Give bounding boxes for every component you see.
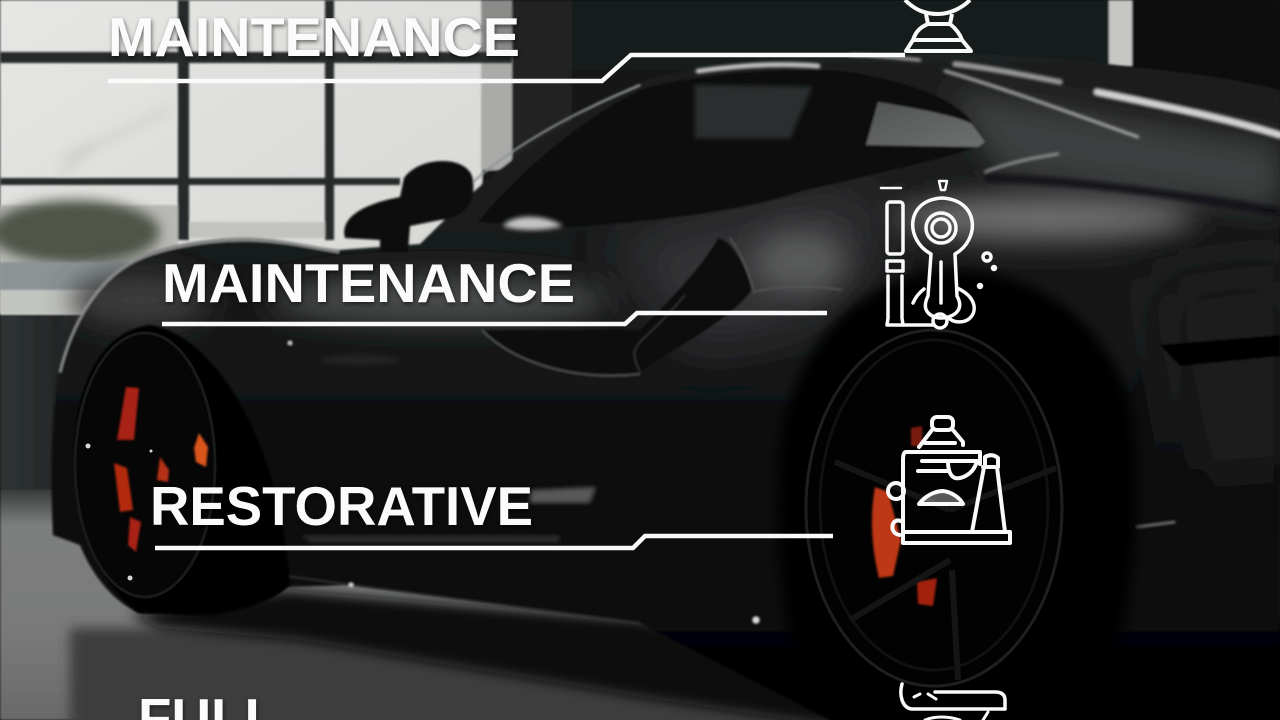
callout line 3 [155, 536, 833, 548]
window frame and view [0, 0, 512, 314]
windshield pillar highlight [473, 85, 640, 182]
rear quarter glass [866, 102, 985, 147]
icon: bottom item [901, 684, 1005, 720]
rear flank [1150, 260, 1280, 490]
mirror [344, 161, 473, 252]
callout line 1 [108, 55, 905, 81]
heading: Restorative: RESTORATIVE [150, 475, 533, 537]
icon: bottle and cone [888, 417, 1010, 543]
windshield glint [503, 217, 563, 230]
door highlight [755, 232, 845, 292]
rear deck [950, 90, 1280, 210]
glass reflection [695, 85, 812, 138]
rear arch and tire [778, 270, 1136, 720]
vent [482, 238, 752, 374]
front tire [74, 325, 290, 615]
hub dots [86, 444, 152, 580]
red caliper [114, 387, 208, 552]
roof highlights [698, 55, 1280, 172]
hood sheen [270, 276, 610, 324]
spokes [835, 462, 1056, 680]
heading: Maintenance 2: MAINTENANCE [162, 252, 575, 314]
fender sheen [70, 272, 210, 328]
callout line 2 [162, 313, 827, 324]
icon: top trophy base [905, 0, 971, 51]
shoulder shadow line [985, 178, 1280, 212]
sill line [265, 573, 640, 623]
rear slit [1160, 335, 1280, 366]
side window [478, 70, 985, 228]
rear wheel [806, 330, 1062, 686]
door panel sheen [610, 190, 880, 350]
haunch highlight [895, 196, 1195, 240]
side sill sheens [530, 487, 596, 503]
red caliper [872, 426, 937, 606]
icon: polisher tool [881, 181, 996, 328]
floor reflection and car shadow [70, 590, 830, 720]
hood edge highlight [60, 240, 339, 372]
front wheel [75, 333, 215, 597]
heading: Maintenance 1: MAINTENANCE [108, 6, 520, 68]
